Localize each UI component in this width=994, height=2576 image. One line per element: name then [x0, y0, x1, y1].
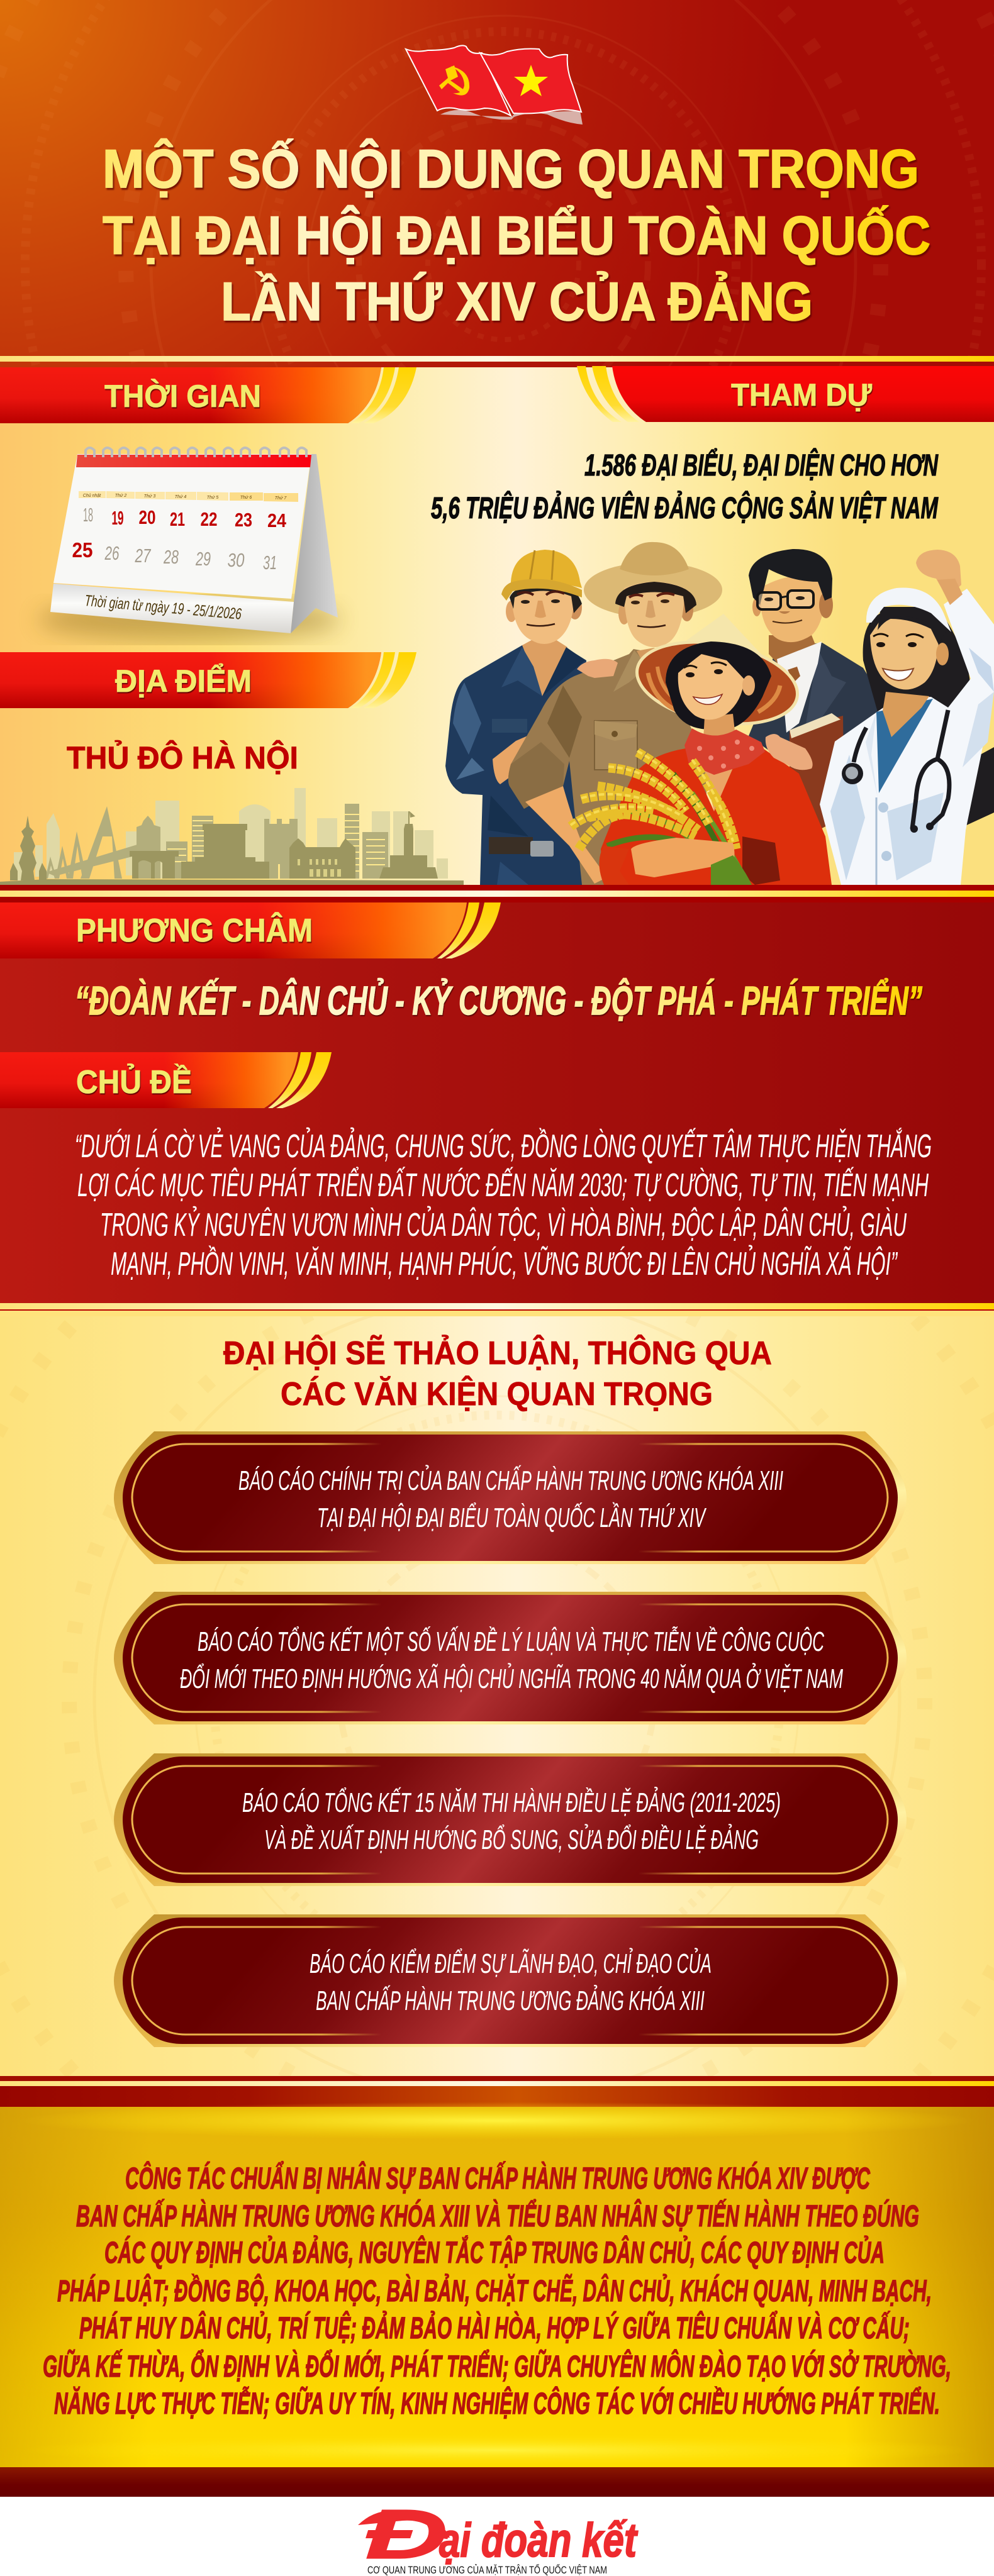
calendar weekday tabs: Thứ 6 — [240, 496, 252, 500]
figure: office worker in suit — [749, 549, 896, 830]
logo: Đại đoàn kết: Đ — [365, 2495, 448, 2573]
calendar dates: 30 — [228, 549, 244, 571]
calendar weekday tabs: Thứ 4 — [175, 495, 186, 499]
calendar dates: 20 — [138, 506, 156, 528]
text: location: THỦ ĐÔ HÀ NỘI — [67, 740, 298, 775]
calendar weekday tabs: Thứ 7 — [275, 496, 287, 501]
calendar dates: 24 — [267, 509, 287, 531]
calendar dates: 31 — [263, 552, 277, 574]
divider stripe — [0, 356, 994, 362]
card: document 4 — [114, 1914, 907, 2047]
title: LẦN THỨ XIV CỦA ĐẢNG — [221, 272, 813, 332]
illustration: five representative figures — [445, 542, 994, 885]
calendar dates: 23 — [235, 509, 252, 531]
calendar weekday tabs: Thứ 3 — [144, 494, 155, 499]
card: document 1: TẠI ĐẠI HỘI ĐẠI BIỂU TOÀN QUỐC LẦN THỨ XIV — [317, 1501, 706, 1533]
calendar dates: 25 — [72, 538, 93, 562]
logo tagline: CƠ QUAN TRUNG ƯƠNG CỦA MẶT TRẬN TỔ QUỐC VIỆT NAM — [367, 2563, 607, 2576]
divider stripe — [0, 1303, 994, 1311]
card: document 4: BAN CHẤP HÀNH TRUNG ƯƠNG ĐẢNG KHÓA XIII — [316, 1984, 705, 2016]
calendar dates: 18 — [83, 504, 93, 526]
calendar caption: Thời gian từ ngày 19 - 25/1/2026 — [84, 592, 242, 623]
section: header background — [0, 0, 994, 367]
calendar dates: 27 — [135, 545, 152, 567]
calendar dates: 22 — [200, 508, 218, 530]
calendar weekday tabs: Thứ 5 — [207, 496, 218, 500]
illustration: Hanoi skyline — [0, 788, 464, 885]
banner: chủ đề — [0, 1052, 332, 1108]
text: calendar shadow and calendar — [38, 448, 340, 641]
book — [790, 716, 844, 830]
card: document 4: BÁO CÁO KIỂM ĐIỂM SỰ LÃNH ĐẠO, CHỈ ĐẠO CỦA — [310, 1947, 712, 1979]
figure: worker with helmet — [445, 550, 586, 885]
section: cream info area — [0, 367, 994, 886]
title — [103, 139, 930, 332]
panel: personnel preparation — [0, 2086, 994, 2497]
calendar dates: 26 — [104, 542, 120, 564]
card: document 3 — [114, 1753, 907, 1886]
banner: địa điểm — [0, 652, 416, 708]
logo: Đại đoàn kết: ại đoàn kết — [439, 2514, 638, 2567]
calendar page — [53, 454, 311, 599]
footer background — [0, 2497, 994, 2576]
calendar weekday tabs: Chủ nhật — [83, 493, 101, 498]
figure: woman with conical hat and rice — [571, 614, 832, 885]
banner: tham dự — [577, 366, 994, 422]
title: TẠI ĐẠI HỘI ĐẠI BIỂU TOÀN QUỐC — [103, 206, 930, 266]
heading: documents — [223, 1335, 772, 1413]
heading: documents: CÁC VĂN KIỆN QUAN TRỌNG — [281, 1375, 713, 1413]
flag: national star — [480, 49, 581, 113]
banner: tham dự: THAM DỰ — [731, 377, 872, 413]
flag: party hammer and sickle — [406, 45, 511, 116]
calendar base — [50, 584, 294, 633]
banner: phương châm — [0, 902, 501, 958]
calendar stand — [291, 454, 338, 633]
text: personnel preparation — [43, 2161, 951, 2421]
card: document 1 — [114, 1431, 907, 1564]
banner: phương châm: PHƯƠNG CHÂM — [76, 912, 313, 949]
icon: party and national flags — [406, 45, 583, 125]
title: MỘT SỐ NỘI DUNG QUAN TRỌNG — [103, 139, 919, 199]
hand on shoulder — [766, 734, 813, 770]
banner: địa điểm: ĐỊA ĐIỂM — [115, 663, 252, 699]
banner: thời gian: THỜI GIAN — [104, 379, 261, 414]
calendar dates: 29 — [195, 548, 211, 570]
rice bundle — [571, 751, 749, 885]
text: attendance — [431, 448, 939, 525]
banner: chủ đề: CHỦ ĐỀ — [76, 1063, 192, 1101]
calendar dates — [72, 504, 287, 574]
banner: thời gian — [0, 367, 416, 423]
card: document 2 — [114, 1592, 907, 1724]
figure: farmer with straw hat — [493, 542, 722, 885]
heading: documents: ĐẠI HỘI SẼ THẢO LUẬN, THÔNG QUA — [223, 1335, 772, 1372]
figure: doctor with stethoscope — [820, 550, 994, 885]
text: theme statement — [75, 1127, 932, 1282]
panel: slogan and theme — [0, 902, 994, 1303]
calendar dates: 28 — [163, 546, 179, 568]
calendar weekday tabs: Thứ 2 — [115, 494, 126, 498]
calendar dates: 19 — [112, 507, 123, 529]
divider stripe — [0, 885, 994, 902]
calendar weekday tabs — [79, 491, 298, 502]
calendar dates: 21 — [170, 508, 185, 530]
logo: Đại đoàn kết — [358, 2495, 638, 2576]
section: documents background — [0, 1311, 994, 2077]
divider stripe — [0, 2076, 994, 2087]
